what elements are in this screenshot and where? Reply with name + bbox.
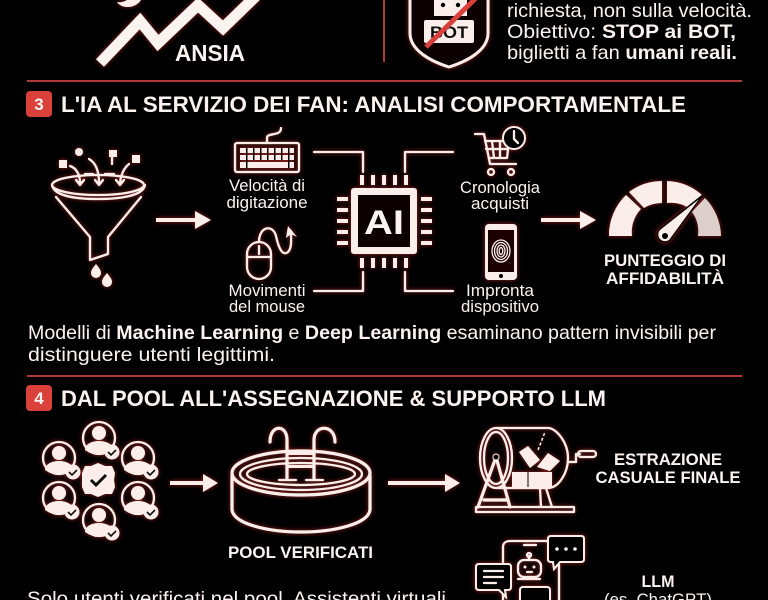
section divider [27,375,742,377]
connector lines [314,152,453,291]
label: reliability score: AFFIDABILITÀ [606,269,724,288]
label: reliability score [604,251,726,288]
icon: anxiety rising chart [100,0,257,63]
label: purchase history [460,178,541,213]
section 3 heading: L'IA AL SERVIZIO DEI FAN: ANALISI COMPORTAMENTALE [61,92,686,117]
label: final random draw: CASUALE FINALE [596,468,740,487]
text: objective: richiesta, non sulla velocità. [507,0,752,22]
icon: raffle drum [476,428,596,512]
text: objective: Obiettivo: STOP ai BOT, [507,21,736,43]
label: LLM [604,572,712,600]
label: reliability score: PUNTEGGIO DI [604,251,726,270]
text: objective [507,0,752,64]
text: machine learning description [28,322,716,366]
vertical divider [383,0,385,62]
icon: keyboard [235,128,299,172]
text: machine learning description: distinguere utenti legittimi. [28,344,275,366]
icon: AI chip: AI [364,204,404,242]
text: objective: biglietti a fan umani reali. [507,42,737,64]
label: mouse movements: del mouse [229,297,305,316]
label: typing speed: digitazione [226,193,308,212]
section divider [27,80,742,82]
label: ansia: ANSIA [175,40,245,66]
icon: chatbot phone [476,536,584,600]
icon: pool [232,428,370,532]
icon: shield stop bot [410,0,488,67]
section 3 heading: 3 [34,95,44,114]
icon: shield stop bot: BOT [430,23,469,42]
label: purchase history: Cronologia [460,178,541,197]
arrow: signals to score [541,211,596,229]
label: final random draw [596,450,740,487]
arrow: funnel to signals [156,211,211,229]
icon: data funnel [52,148,145,287]
icon: AI chip [337,175,432,268]
section 4 heading: DAL POOL ALL'ASSEGNAZIONE & SUPPORTO LLM [61,386,606,411]
icon: bird fragment [117,0,141,7]
label: mouse movements: Movimenti [228,281,306,300]
label: device fingerprint [461,281,539,316]
icon: gauge [609,181,721,242]
section 4 heading: 4 [34,389,44,408]
icon: mouse [247,226,297,279]
text: machine learning description: Modelli di Machine Learning e Deep Learning esaminano pattern invisibili per [28,322,716,344]
label: mouse movements [228,281,306,316]
label: final random draw: ESTRAZIONE [614,450,722,469]
label: typing speed: Velocità di [229,176,305,195]
label: typing speed [226,176,308,212]
label: LLM: LLM [642,572,674,591]
arrow: users to pool [170,474,218,492]
icon: verified users group [43,422,158,540]
icon: cart with clock [475,127,525,175]
arrow: pool to draw [388,474,460,492]
label: purchase history: acquisti [471,194,529,213]
label: device fingerprint: dispositivo [461,297,539,316]
label: verified pool: POOL VERIFICATI [228,543,373,562]
icon: phone fingerprint [485,224,517,280]
label: device fingerprint: Impronta [466,281,535,300]
